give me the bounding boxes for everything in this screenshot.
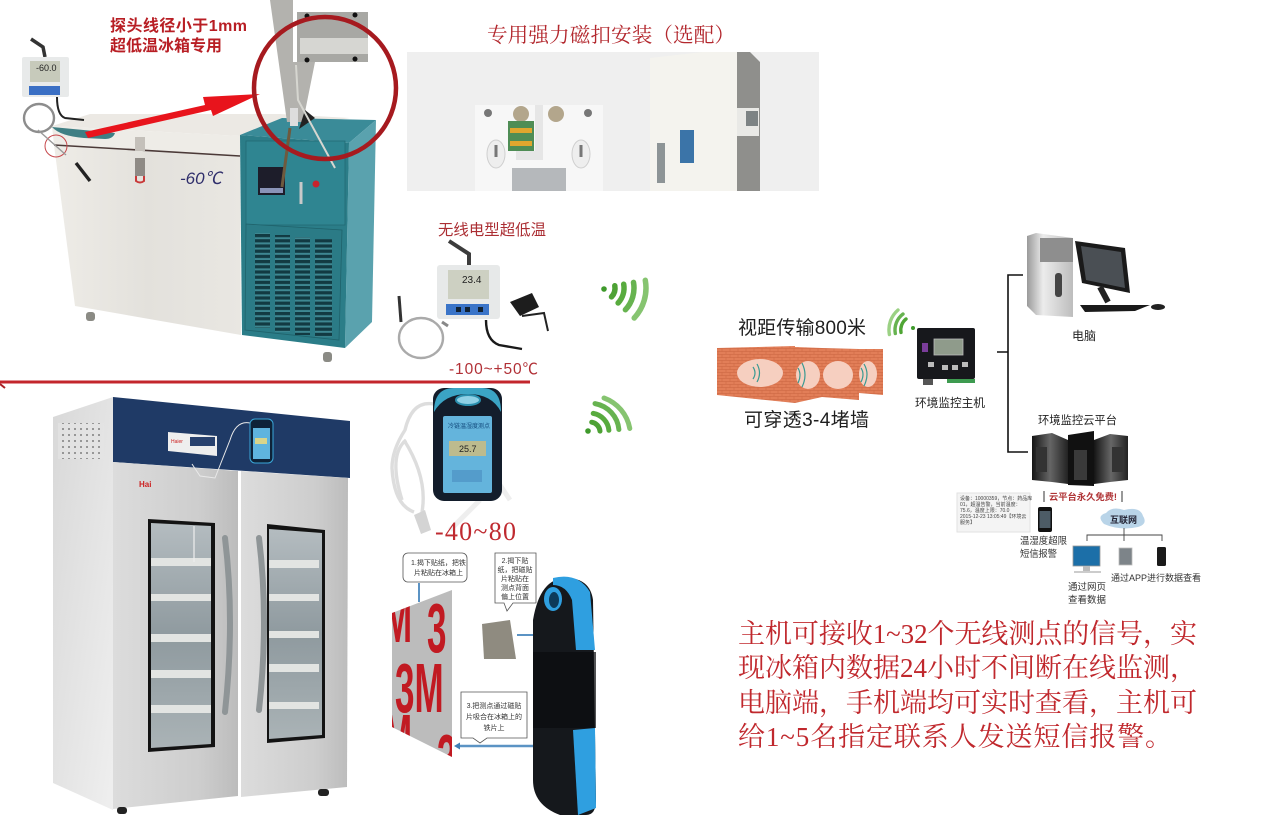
smartphone bbox=[1038, 507, 1052, 532]
step 1 callout: 1.揭下贴纸，把铁 bbox=[411, 558, 466, 567]
web view label: 查看数据 bbox=[1068, 594, 1106, 606]
photo: double-door pharmacy refrigerator bbox=[53, 397, 350, 814]
right window bbox=[267, 524, 325, 743]
icon: wifi signal upper bbox=[601, 280, 646, 318]
white sensor cable bbox=[392, 404, 434, 512]
wall penetration label: 可穿透3-4堵墙 bbox=[744, 409, 869, 431]
magnetic sheet bbox=[482, 620, 516, 659]
grey photo background bbox=[407, 52, 819, 191]
keyboard and mouse bbox=[1080, 304, 1165, 312]
computer label: 电脑 bbox=[1072, 329, 1096, 343]
photo: ultra-low temperature chest freezer bbox=[22, 0, 396, 362]
teal compressor cabinet bbox=[240, 118, 376, 348]
latch bbox=[135, 137, 145, 182]
probe tip bbox=[414, 510, 431, 534]
freezer lid bbox=[52, 114, 350, 136]
internet branch lines bbox=[1087, 528, 1162, 541]
red magnifier circle bbox=[254, 17, 396, 159]
cloud platform label: 环境监控云平台 bbox=[1038, 413, 1117, 427]
tablet bbox=[1119, 548, 1132, 565]
SMS message card: 75.6，温度上限：70.0 bbox=[960, 507, 1010, 514]
watermark strokes bbox=[450, 470, 510, 530]
red description text: 电脑端，手机端均可实时查看，主机可 bbox=[738, 688, 1197, 718]
step 3 callout: 3.把测点通过磁贴 bbox=[467, 701, 521, 710]
red button bbox=[312, 180, 320, 188]
red description text bbox=[738, 619, 1197, 752]
recorder device showing -60.0 bbox=[22, 39, 69, 97]
device back with magnets bbox=[475, 105, 603, 191]
teal handle strip bbox=[52, 127, 115, 139]
SMS message card: 2015-12-23 13:05:49【环境云 bbox=[960, 513, 1026, 520]
phone bbox=[1157, 547, 1166, 566]
step 3 callout: 片吸合在冰箱上的 bbox=[466, 712, 522, 721]
step 1 callout: 片粘贴在冰箱上 bbox=[414, 568, 463, 577]
probe wire bbox=[192, 423, 250, 478]
step 2 callout: 片粘贴在 bbox=[501, 574, 529, 583]
small red marker circle bbox=[45, 135, 67, 157]
left window bbox=[148, 519, 215, 752]
magnet mount heading: 专用强力磁扣安装（选配） bbox=[487, 24, 735, 47]
wall-mount recorder showing 23.4: 23.4 bbox=[462, 275, 482, 286]
cloud platform bbox=[957, 413, 1201, 606]
app view label: 通过APP进行数据查看 bbox=[1111, 572, 1201, 583]
SMS message card bbox=[957, 493, 1032, 532]
connector line bbox=[517, 634, 551, 636]
step 1 callout bbox=[403, 553, 467, 602]
desktop display bbox=[1073, 546, 1101, 573]
panel: magnetic mount option bbox=[407, 24, 819, 191]
SMS message card: 服务】 bbox=[960, 519, 975, 526]
step 2 callout: 测点背面 bbox=[501, 583, 529, 592]
brick walls bbox=[717, 346, 883, 403]
power adapter bbox=[510, 293, 548, 331]
desktop computer bbox=[1027, 233, 1165, 343]
antenna bbox=[449, 241, 469, 266]
temperature range label: -100~+50℃ bbox=[449, 361, 538, 378]
door handles bbox=[225, 538, 264, 712]
red description text: 现冰箱内数据24小时不间断在线监测， bbox=[738, 653, 1197, 683]
white cabinet with mounted device bbox=[650, 52, 760, 191]
recorder device showing -60.0: -60.0 bbox=[36, 63, 57, 73]
SMS alarm label: 短信报警 bbox=[1020, 548, 1057, 559]
iron sheet with 3M backing: 3M bbox=[395, 649, 444, 727]
host label: 环境监控主机 bbox=[915, 396, 985, 410]
internet cloud bbox=[1100, 509, 1145, 528]
iron sheet with 3M backing bbox=[392, 590, 452, 757]
section divider line bbox=[0, 380, 530, 388]
sensor body bbox=[433, 388, 502, 501]
lcd reading 25.7 bbox=[449, 441, 486, 456]
icon: wifi signal lower bbox=[585, 398, 630, 434]
control panel: Haier bbox=[171, 439, 183, 445]
step 3 callout bbox=[461, 692, 527, 743]
rugged sensor side view bbox=[533, 577, 596, 815]
SMS message card: 01，超温告警，当前温度： bbox=[960, 501, 1021, 508]
caliper magnified view bbox=[270, 0, 368, 187]
probe cable and tip bbox=[24, 97, 90, 181]
transmission distance label: 视距传输800米 bbox=[738, 317, 866, 339]
digital controller bbox=[258, 167, 285, 195]
wall-mount recorder showing 23.4 bbox=[437, 265, 500, 319]
step 2 callout: 偏上位置 bbox=[501, 592, 529, 601]
cabinet side bbox=[53, 397, 113, 810]
iron sheet with 3M backing: M bbox=[383, 579, 412, 657]
panel: wireless ultra-low temperature device bbox=[399, 221, 548, 378]
icon: wifi signal near walls bbox=[889, 310, 915, 334]
red description text: 给1~5名指定联系人发送短信报警。 bbox=[738, 722, 1172, 752]
coiled probe bbox=[399, 296, 448, 358]
photo: humidity sensor with -40~80 range bbox=[392, 388, 502, 534]
freezer white body bbox=[54, 145, 241, 335]
sensor temperature range: -40~80 bbox=[435, 517, 516, 546]
sensor front panel bbox=[443, 416, 492, 493]
iron sheet with 3M backing: 3 bbox=[437, 720, 456, 798]
panel: wall penetration bbox=[717, 310, 915, 431]
step 3 callout: 铁片上 bbox=[484, 723, 504, 732]
probe diameter note: 超低温冰箱专用 bbox=[110, 36, 222, 55]
step 2 callout: 纸，把磁贴 bbox=[498, 565, 532, 574]
red pointing arrow bbox=[85, 94, 260, 138]
probe diameter note bbox=[110, 16, 247, 55]
casters bbox=[86, 312, 332, 362]
right door bbox=[241, 471, 348, 797]
photo: humidity sensor with -40~80 range: 25.7 bbox=[459, 444, 477, 454]
computer tower bbox=[1027, 233, 1073, 317]
key switch bbox=[300, 182, 302, 204]
SMS alarm label bbox=[1020, 535, 1068, 559]
environment monitoring host bbox=[915, 328, 985, 410]
web view label bbox=[1068, 581, 1106, 606]
probe diameter note: 探头线径小于1mm bbox=[110, 16, 247, 35]
casters bbox=[117, 789, 329, 814]
iron sheet with 3M backing: 3 bbox=[427, 589, 446, 667]
device heading: 无线电型超低温 bbox=[438, 221, 546, 239]
navy top header bbox=[113, 397, 350, 478]
door logo: Hai bbox=[139, 480, 151, 489]
free cloud platform note: 云平台永久免费! bbox=[1049, 491, 1117, 502]
SMS alarm label: 温湿度超限 bbox=[1020, 535, 1068, 546]
sensor mounted on header bbox=[250, 419, 273, 463]
web view label: 通过网页 bbox=[1068, 581, 1106, 593]
power cable bbox=[486, 320, 522, 349]
monitor bbox=[1075, 241, 1130, 302]
arrow to iron sheet bbox=[454, 742, 536, 750]
step 2 callout: 2.揭下贴 bbox=[502, 556, 528, 565]
red description text: 主机可接收1~32个无线测点的信号，实 bbox=[738, 619, 1197, 649]
server towers bbox=[1032, 431, 1128, 486]
photo: humidity sensor with -40~80 range: 冷链温湿度测点 bbox=[448, 422, 490, 430]
connection bracket bbox=[997, 275, 1028, 452]
control panel bbox=[168, 432, 217, 456]
left door bbox=[113, 462, 238, 809]
internet cloud: 互联网 bbox=[1110, 514, 1137, 525]
panel: installation steps bbox=[383, 553, 596, 815]
temperature label: -60℃ bbox=[180, 169, 224, 188]
vent slats bbox=[255, 233, 270, 328]
vent holes bbox=[58, 423, 104, 459]
SMS message card: 设备：10000359，节点：药品库 bbox=[960, 495, 1032, 502]
iron sheet with 3M backing: M bbox=[383, 700, 412, 778]
step 2 callout bbox=[495, 553, 536, 611]
